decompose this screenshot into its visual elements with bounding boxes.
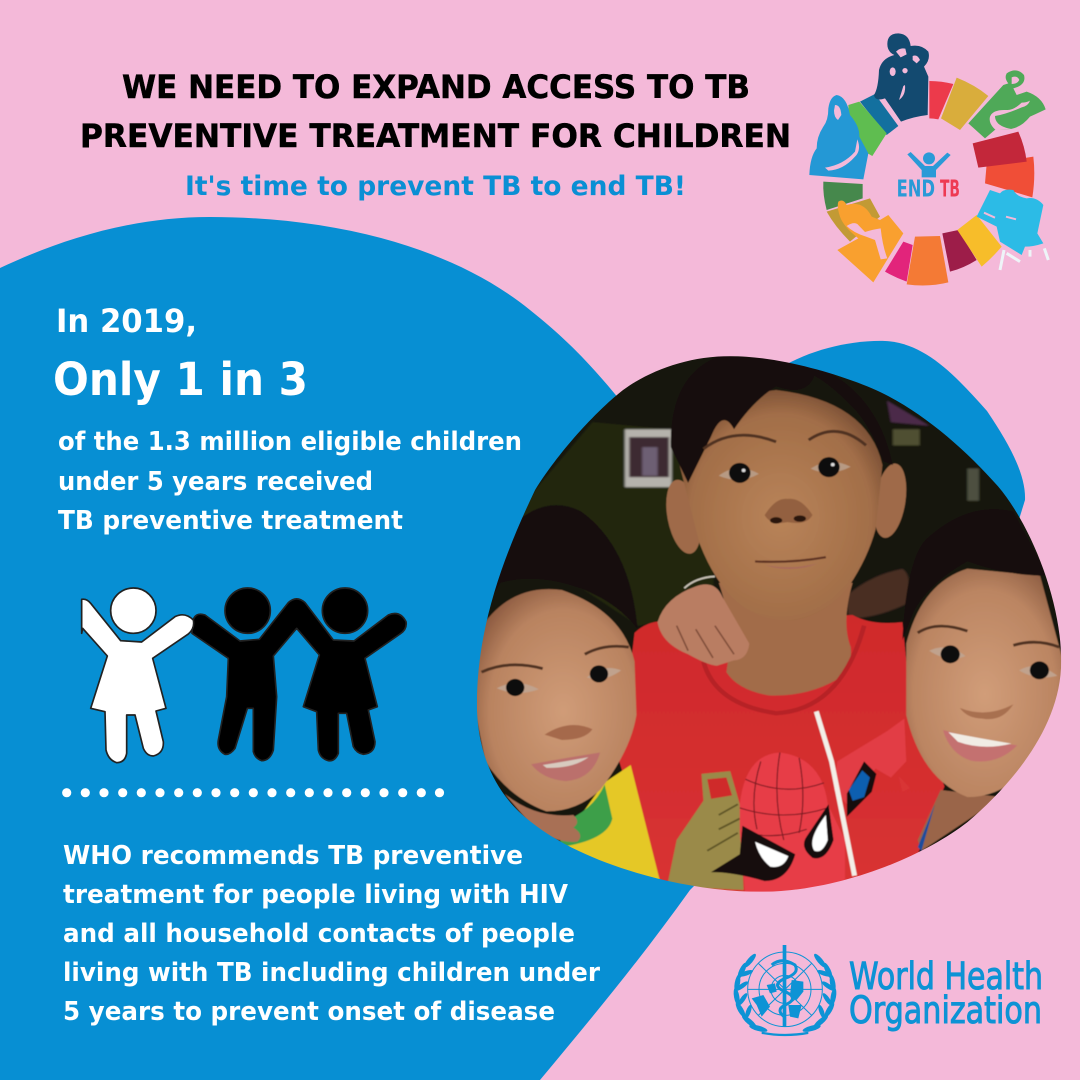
figure: coughing girl in orange bbox=[837, 201, 903, 282]
title: PREVENTIVE TREATMENT FOR CHILDREN bbox=[80, 117, 791, 155]
hand under left boy's chin bbox=[504, 794, 580, 842]
wheel segment: gold bbox=[941, 78, 988, 130]
wheel segment: blue bbox=[860, 94, 898, 135]
icon: black boy and girl bbox=[192, 588, 406, 761]
text block: WHO recommendation bbox=[63, 841, 600, 1027]
small blue blob behind photo bbox=[780, 341, 1025, 526]
photo background bbox=[478, 356, 1061, 852]
middle boy's far hand bbox=[845, 569, 909, 619]
figure: woman in green bbox=[968, 70, 1046, 138]
text block: WHO recommendation: WHO recommends TB preventive bbox=[63, 841, 523, 871]
left boy's hair bbox=[485, 505, 638, 629]
centre person icon bbox=[907, 152, 951, 177]
wheel segment: orange bbox=[907, 236, 948, 285]
WHO wordmark bbox=[849, 955, 1043, 1032]
mask eyes bbox=[711, 826, 795, 881]
continents bbox=[752, 995, 770, 1017]
wheel segment: magenta bbox=[885, 242, 913, 282]
stat description bbox=[58, 427, 522, 536]
wheel segment: maroon bbox=[942, 230, 977, 272]
wheel segment: yellow bbox=[957, 215, 1002, 267]
WHO emblem bbox=[733, 945, 837, 1036]
END TB wordmark: END bbox=[897, 177, 935, 203]
wheel segment: red bbox=[929, 81, 953, 119]
blue collar bbox=[918, 804, 935, 851]
icon: white girl bbox=[82, 588, 194, 763]
WHO wordmark: Organization bbox=[849, 989, 1042, 1032]
hand on shoulder bbox=[657, 584, 749, 666]
text block: WHO recommendation: living with TB including children under bbox=[63, 958, 600, 988]
logo: End TB wheel bbox=[809, 33, 1048, 285]
small spider figure bbox=[834, 719, 906, 804]
icon: three children, one in three highlighted bbox=[82, 588, 406, 763]
middle boy's features bbox=[703, 431, 866, 569]
serpent bbox=[772, 961, 796, 1017]
right boy's neck bbox=[918, 790, 1002, 851]
left boy's face bbox=[474, 589, 636, 811]
staff bbox=[783, 945, 786, 1027]
spider-man print bbox=[667, 711, 910, 897]
middle boy's neck bbox=[719, 583, 853, 696]
wheel segment: dark red bbox=[973, 132, 1027, 168]
photo: three smiling boys bbox=[477, 356, 1062, 892]
middle boy's face bbox=[679, 389, 884, 593]
END TB wordmark: TB bbox=[940, 177, 960, 203]
t-shirt collar bbox=[703, 626, 864, 713]
figure: running children in cyan bbox=[977, 190, 1048, 270]
middle boy's hair bbox=[671, 356, 893, 483]
dotted divider bbox=[62, 788, 444, 797]
text block: WHO recommendation: treatment for people living with HIV bbox=[63, 880, 568, 910]
text block: WHO recommendation: and all household contacts of people bbox=[63, 919, 575, 949]
globe bbox=[748, 952, 822, 1027]
wheel segment: olive bbox=[827, 198, 880, 242]
panel: large blue blob bbox=[0, 217, 720, 1080]
right boy's hair bbox=[902, 509, 1048, 640]
figure: pregnant woman in blue bbox=[809, 95, 868, 179]
wheel segment: dark green bbox=[823, 182, 863, 210]
web line bbox=[816, 711, 855, 876]
left boy's green collar bbox=[560, 785, 612, 847]
stat intro: In 2019, bbox=[56, 302, 197, 340]
right boy's face bbox=[906, 569, 1063, 797]
title: WE NEED TO EXPAND ACCESS TO TB bbox=[122, 68, 750, 106]
stat description: TB preventive treatment bbox=[58, 506, 403, 536]
red t-shirt bbox=[619, 615, 944, 897]
text block: statistic bbox=[53, 302, 522, 536]
left boy's features bbox=[481, 646, 629, 781]
right boy's features bbox=[918, 626, 1059, 761]
middle boy's ears bbox=[665, 479, 700, 554]
text block: WHO recommendation: 5 years to prevent onset of disease bbox=[63, 997, 555, 1027]
wheel segment: light green bbox=[848, 102, 887, 156]
spider head bbox=[740, 752, 845, 897]
laurel wreath right bbox=[802, 952, 837, 1033]
wheel segment: orange-red bbox=[985, 157, 1034, 197]
figure: family in navy bbox=[874, 33, 929, 122]
stat headline: Only 1 in 3 bbox=[53, 353, 308, 406]
title bbox=[80, 68, 791, 155]
backpack print bbox=[667, 771, 744, 890]
bracelet bbox=[684, 576, 715, 588]
stat description: of the 1.3 million eligible children bbox=[58, 427, 522, 457]
logo: World Health Organization bbox=[733, 945, 1043, 1036]
wreath base bbox=[762, 1032, 808, 1036]
laurel wreath left bbox=[733, 952, 768, 1033]
left boy's yellow shirt bbox=[567, 764, 660, 880]
stat description: under 5 years received bbox=[58, 467, 373, 497]
subtitle: It's time to prevent TB to end TB! bbox=[185, 171, 686, 202]
